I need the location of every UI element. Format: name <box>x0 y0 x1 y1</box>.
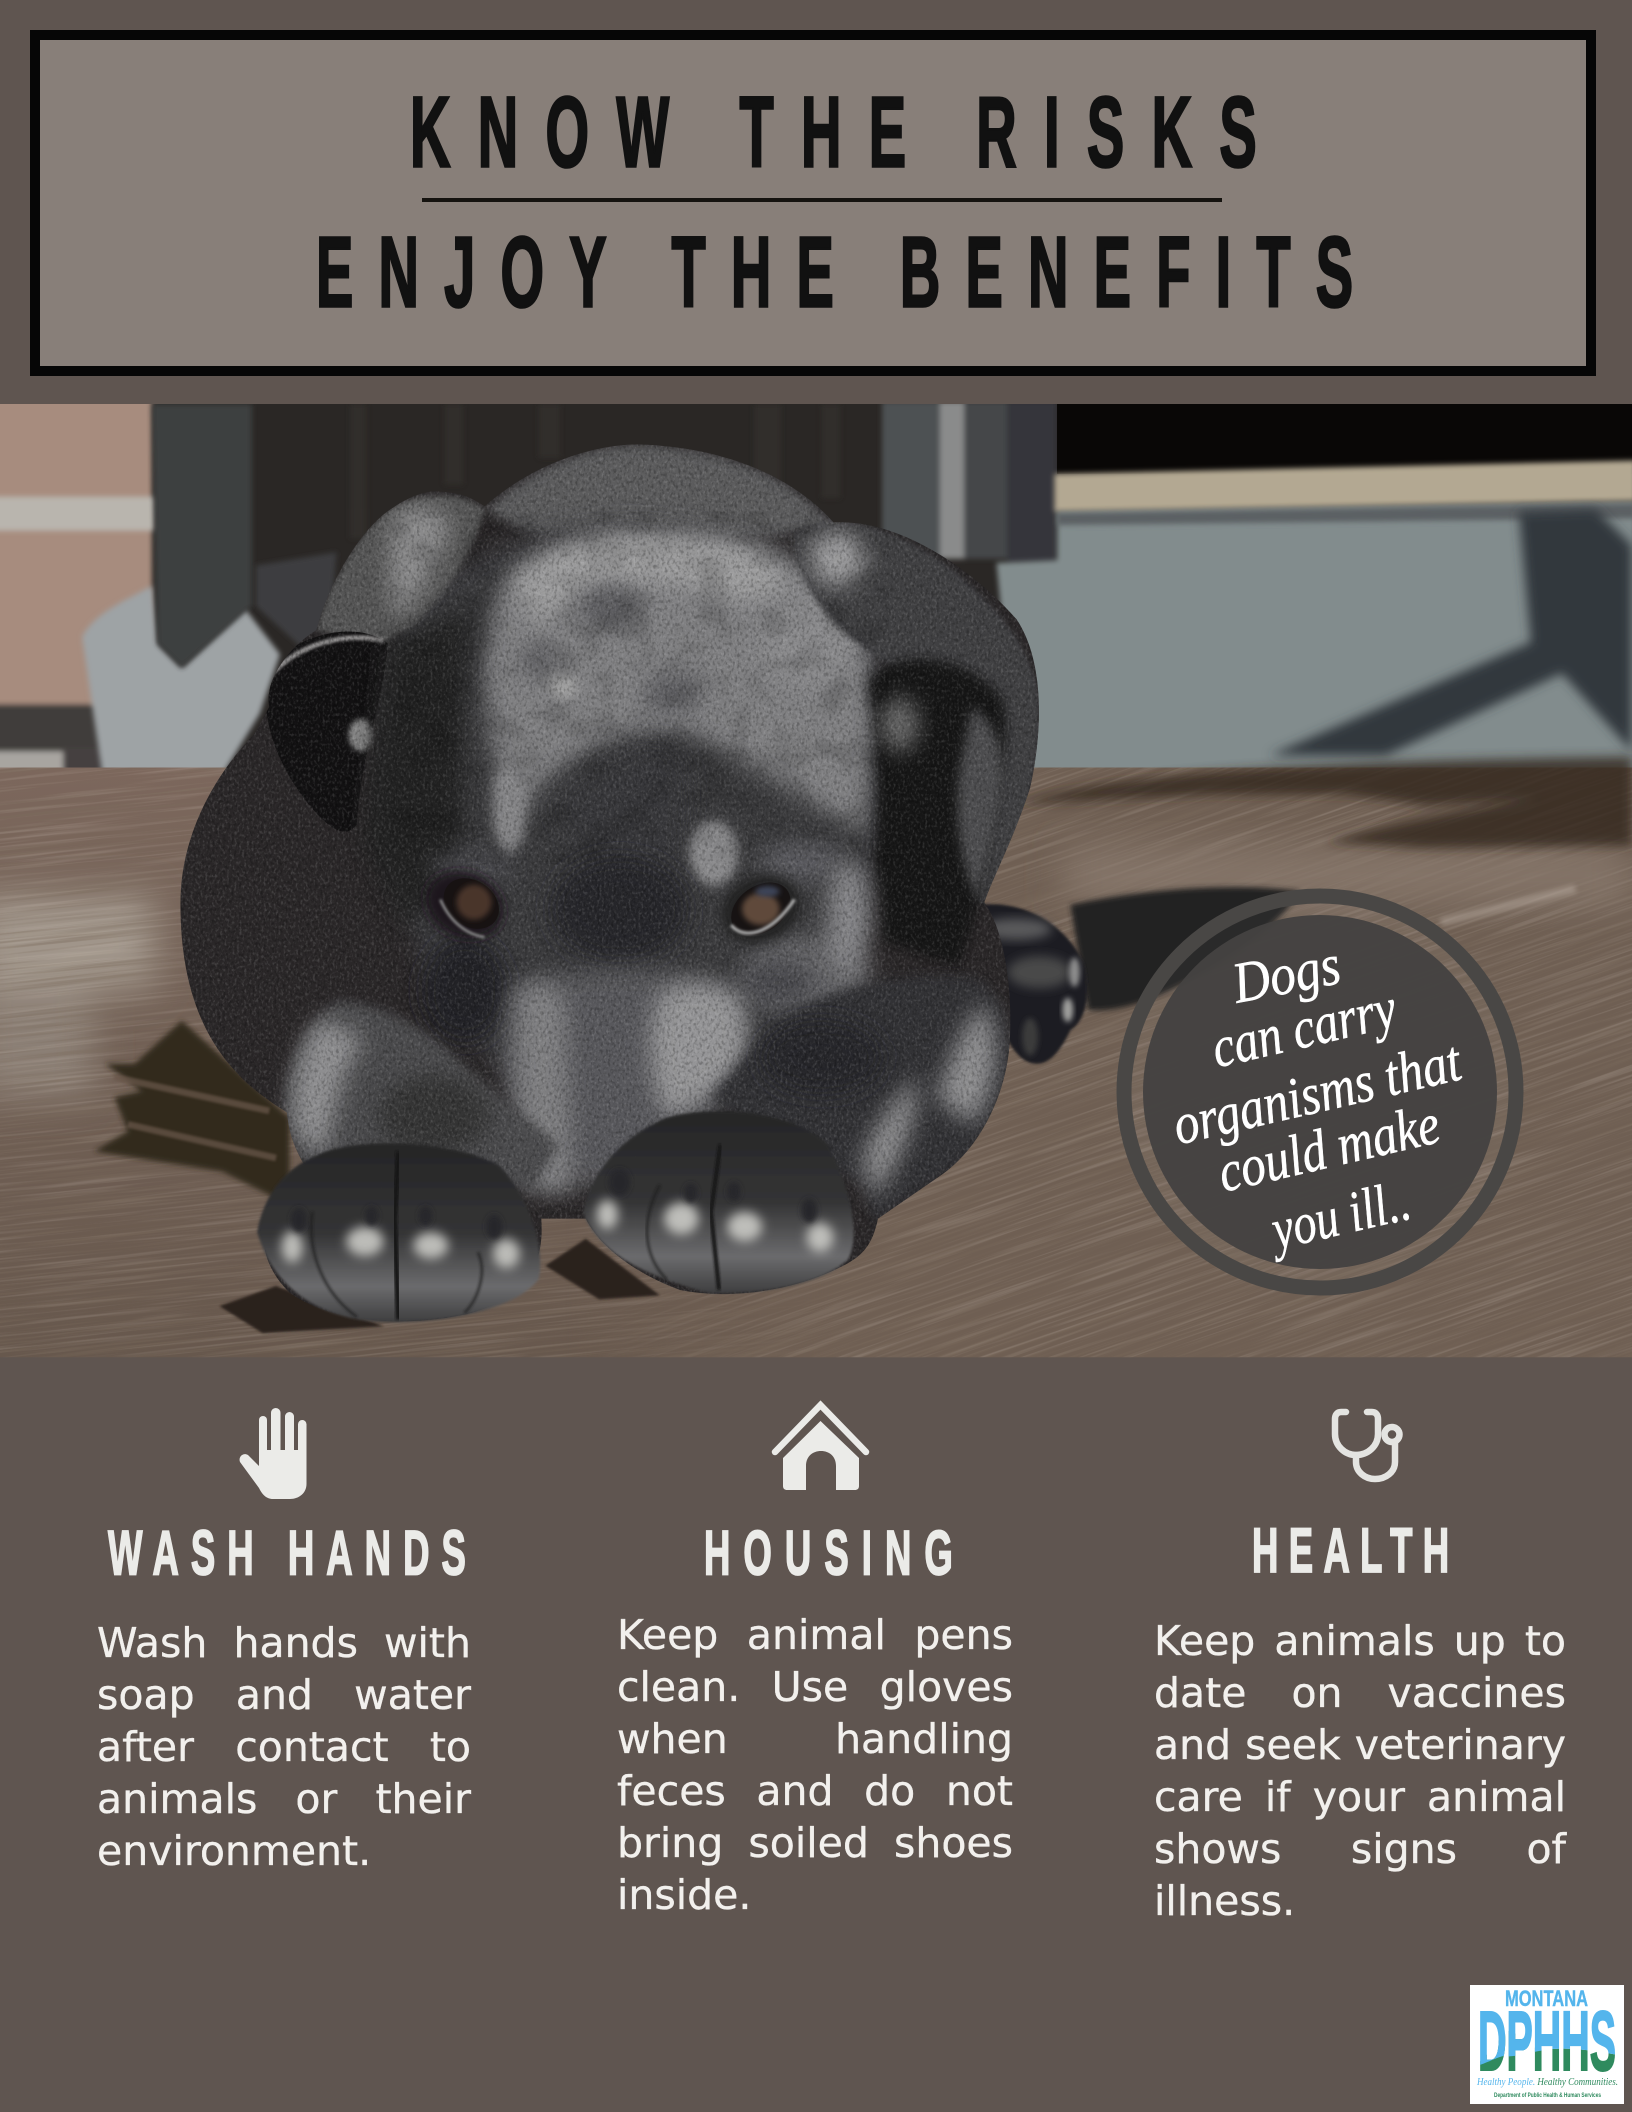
muzzle highlights <box>505 970 747 1185</box>
icon: stethoscope <box>1335 1412 1400 1479</box>
dark band left of the face <box>361 606 471 929</box>
badge message <box>1167 931 1468 1263</box>
wood grain left <box>0 768 688 1358</box>
dark plank wall <box>350 404 840 539</box>
photo: puppy lying on wooden deck <box>0 404 1632 1358</box>
text block: health: shows signs of <box>1154 1825 1566 1873</box>
text block: wash hands: soap and water <box>97 1671 471 1719</box>
text block: housing: Keep animal pens <box>617 1611 1013 1659</box>
highlight streak <box>1441 889 1575 922</box>
cheeks <box>421 859 873 1044</box>
right eye <box>711 863 811 955</box>
text block: health: illness. <box>1154 1877 1295 1925</box>
forehead sheen, narrowing to a V above the brow <box>485 534 872 842</box>
dog silhouette <box>180 444 1039 1321</box>
title line: enjoy the benefits: ENJOY THE BENEFITS <box>316 218 1353 329</box>
shadow slats left of the dog <box>94 1021 290 1205</box>
header box <box>35 35 1591 371</box>
title line: know the risks: KNOW THE RISKS <box>410 78 1257 189</box>
central V <box>552 740 689 889</box>
neck hump <box>485 444 835 539</box>
icon: hand <box>240 1408 306 1499</box>
left ear flap <box>265 631 388 832</box>
text block: health: Keep animals up to <box>1154 1617 1566 1665</box>
wooden deck <box>0 750 1632 1358</box>
left fold <box>316 496 485 644</box>
badge translucent gap <box>1130 902 1510 1282</box>
right ear dark flap <box>869 659 1005 967</box>
badge message: can carry <box>1205 975 1402 1080</box>
badge disc <box>1143 915 1497 1269</box>
tail <box>1070 887 1299 1010</box>
dog body and head <box>175 438 1050 1326</box>
logo background <box>1470 1985 1624 2104</box>
text block: wash hands <box>97 1619 472 1875</box>
badge message: could make <box>1212 1091 1446 1205</box>
heading: housing: HOUSING <box>704 1517 953 1588</box>
badge message: Dogs <box>1226 931 1346 1016</box>
right foreleg <box>711 976 1010 1223</box>
badge message: organisms that <box>1167 1028 1468 1157</box>
heading: health: HEALTH <box>1252 1515 1449 1585</box>
icon: dog house <box>775 1405 866 1490</box>
text block: health: date on vaccines <box>1154 1669 1566 1717</box>
shaded fur painting clipped to the silhouette <box>175 438 1050 1326</box>
forehead crest <box>509 534 785 626</box>
black opening <box>1057 401 1632 474</box>
text block: housing: inside. <box>617 1871 751 1919</box>
deck light patches right <box>1064 848 1629 902</box>
deck light patches <box>0 895 155 1097</box>
text block: housing: clean. Use gloves <box>617 1663 1013 1711</box>
text block: housing: when handling <box>617 1715 1013 1763</box>
heading: wash hands: WASH HANDS <box>108 1517 466 1588</box>
wood grain right <box>670 768 1632 1358</box>
right ear <box>794 521 1040 903</box>
logo wordmark montana: MONTANA <box>1505 1986 1588 2011</box>
badge message: you ill.. <box>1261 1167 1416 1263</box>
text block: housing <box>617 1611 1013 1919</box>
forehead mottling <box>520 584 703 714</box>
badge ring <box>1124 896 1516 1288</box>
grey concrete <box>996 501 1632 774</box>
left foreleg <box>286 1000 559 1192</box>
title divider <box>422 198 1222 202</box>
brick pillar <box>0 397 155 776</box>
logo tagline: Healthy People. Healthy Communities. <box>1476 2077 1618 2088</box>
shadows on deck <box>1017 757 1632 848</box>
head base <box>381 522 892 1158</box>
text block: health <box>1154 1617 1567 1925</box>
back right paw <box>976 904 1087 1064</box>
text block: wash hands: Wash hands with <box>97 1619 471 1667</box>
badge: dogs can carry organisms <box>1124 896 1516 1288</box>
text block: wash hands: animals or their <box>97 1775 471 1823</box>
logo: montana dphhs <box>1470 1985 1624 2104</box>
text block: housing: feces and do not <box>617 1767 1013 1815</box>
dark post <box>152 404 252 668</box>
shadow of rail on wall <box>1270 509 1632 755</box>
text block: wash hands: environment. <box>97 1827 371 1875</box>
fur texture <box>175 438 1050 1326</box>
left front paw <box>257 1143 540 1322</box>
text block: health: care if your animal <box>1154 1773 1566 1821</box>
tan beam <box>1054 461 1632 512</box>
left eye <box>414 859 515 951</box>
logo department line: Department of Public Health & Human Services <box>1494 2093 1602 2099</box>
brow folds and dark centre <box>431 843 842 963</box>
right door posts <box>882 401 1057 563</box>
header panel <box>35 35 1591 371</box>
text block: health: and seek veterinary <box>1154 1721 1566 1769</box>
concrete footing <box>82 586 280 776</box>
photo backdrop <box>0 397 1632 794</box>
text block: housing: bring soiled shoes <box>617 1819 1013 1867</box>
right front paw <box>583 1111 854 1293</box>
text block: wash hands: after contact to <box>97 1723 471 1771</box>
